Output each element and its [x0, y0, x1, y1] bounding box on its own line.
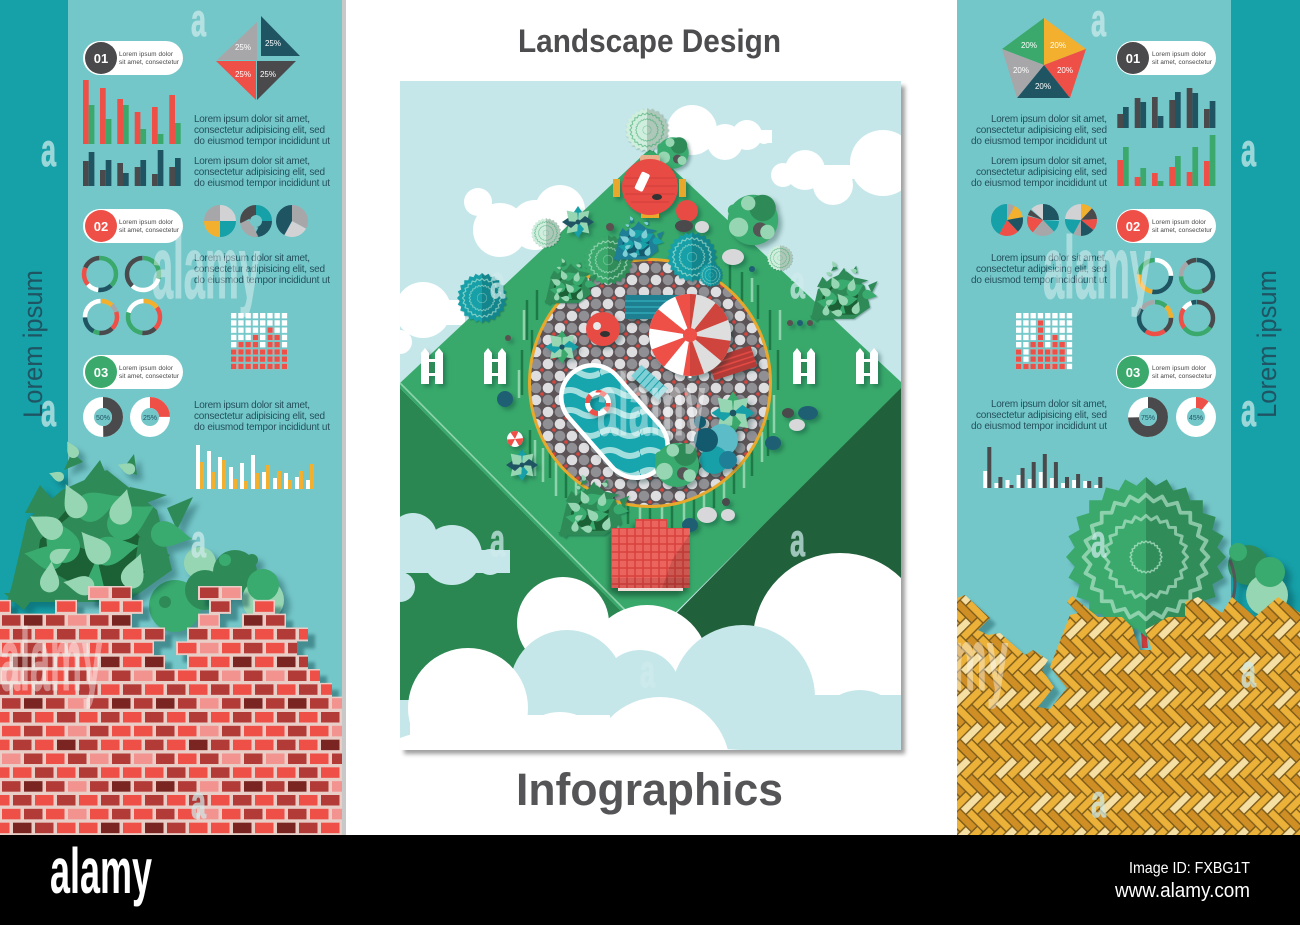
diamond chart: 25% — [260, 70, 276, 79]
left panel — [0, 0, 349, 843]
white and orange bar chart — [196, 445, 314, 489]
central poster illustration — [400, 81, 901, 750]
flower left — [506, 449, 538, 481]
pill 01 — [83, 41, 183, 75]
pill 02: 02 — [94, 219, 108, 234]
ring charts — [1139, 260, 1213, 334]
vertical heading: Lorem ipsum — [18, 270, 48, 418]
tree: teal small — [699, 263, 723, 287]
paragraph 2: Lorem ipsum dolor sit amet, — [194, 156, 310, 167]
poster shadow — [404, 86, 905, 754]
paragraph 1: do eiusmod tempor incididunt ut — [194, 136, 330, 147]
swimming pool rim — [593, 397, 636, 446]
swimming pool water — [593, 397, 636, 446]
paragraph 3: Lorem ipsum dolor sit amet, — [991, 253, 1107, 264]
pentagon chart: 20% — [1057, 66, 1073, 75]
watermark letters: a — [790, 256, 805, 308]
small bush behind tree — [1225, 543, 1288, 616]
white and grey bar chart — [983, 447, 1102, 488]
front white clouds — [400, 648, 740, 837]
donut 25 percent — [130, 397, 170, 437]
fence section 4 — [856, 348, 878, 384]
watermark letters: a — [790, 514, 805, 566]
small red table — [586, 312, 620, 346]
brick wall — [0, 586, 342, 835]
pill 02: sit amet, consectetur — [119, 227, 179, 234]
watermark letters: a — [640, 645, 655, 697]
donut 25 percent: 25% — [143, 415, 157, 422]
bush: round lower — [655, 443, 699, 487]
tree: teal left — [457, 273, 507, 323]
infographics heading: Infographics — [516, 764, 783, 815]
bottom black band — [0, 835, 1300, 925]
watermark letters: a — [191, 776, 206, 828]
donut 50 percent — [83, 397, 123, 437]
teal sun lounger — [625, 295, 690, 319]
sky — [400, 81, 901, 613]
paragraph 1 — [971, 114, 1107, 147]
pixel grid chart — [1016, 313, 1073, 371]
paragraph 4: Lorem ipsum dolor sit amet, — [991, 399, 1107, 410]
donut 75 percent: 75% — [1141, 415, 1155, 422]
lower right hill — [677, 388, 901, 638]
pentagon chart — [1002, 18, 1086, 98]
diamond chart: 25% — [235, 43, 251, 52]
bush: teal leaves — [613, 215, 664, 262]
paragraph 2 — [194, 156, 330, 189]
watermark alamy marks: alamy — [900, 610, 1008, 709]
garden stones — [497, 223, 818, 532]
bush: far right leaves — [810, 260, 878, 322]
tree: teal large — [667, 232, 717, 282]
paragraph 2: do eiusmod tempor incididunt ut — [971, 178, 1107, 189]
pill 01: sit amet, consectetur — [119, 59, 179, 66]
vertical heading: Lorem ipsum — [1252, 270, 1282, 418]
fence section 1 — [421, 348, 443, 384]
pill 02: sit amet, consectetur — [1152, 227, 1212, 234]
bush: top round — [657, 137, 689, 169]
paragraph 1: Lorem ipsum dolor sit amet, — [991, 114, 1107, 125]
exploded pie charts — [999, 212, 1089, 228]
middle pale clouds — [400, 625, 905, 780]
paragraph 3 — [194, 253, 330, 286]
paragraph 3: consectetur adipisicing elit, sed — [976, 264, 1107, 275]
pill 03: sit amet, consectetur — [119, 373, 179, 380]
watermark alamy marks: alamy — [0, 610, 102, 709]
tree: pale top — [625, 108, 669, 152]
upper clouds — [388, 105, 916, 354]
paragraph 4 — [194, 400, 330, 433]
paving stones — [531, 261, 769, 505]
grey and teal bar chart — [1117, 88, 1215, 128]
paragraph 4: consectetur adipisicing elit, sed — [976, 410, 1107, 421]
right panel dark teal strip — [1231, 0, 1300, 835]
grey and teal bar chart — [83, 150, 181, 186]
paragraph 2 — [971, 156, 1107, 189]
paragraph 3: do eiusmod tempor incididunt ut — [971, 275, 1107, 286]
pill 01: 01 — [1126, 51, 1140, 66]
right panel — [957, 0, 1300, 841]
house roof — [611, 519, 690, 591]
watermark letters: a — [1241, 645, 1256, 697]
grass strokes — [519, 265, 780, 535]
life buoy — [588, 392, 608, 414]
red lounger — [708, 345, 757, 380]
tree: green centre — [583, 235, 633, 285]
pill 01 — [1116, 41, 1216, 75]
flower top left — [562, 206, 594, 238]
paragraph 2: consectetur adipisicing elit, sed — [976, 167, 1107, 178]
watermark letters: a — [41, 124, 56, 176]
pill 01: Lorem ipsum dolor — [1152, 51, 1206, 58]
watermark letters: a — [41, 384, 56, 436]
pill 03 — [83, 355, 183, 389]
pentagon chart: 20% — [1035, 82, 1051, 91]
pale cloud on left hill — [400, 513, 510, 602]
red fruit and stones — [675, 200, 709, 233]
pill 02 — [1116, 209, 1216, 243]
paragraph 1: consectetur adipisicing elit, sed — [194, 125, 325, 136]
pill 01: Lorem ipsum dolor — [119, 51, 173, 58]
pill 03: 03 — [1126, 365, 1140, 380]
paragraph 3: consectetur adipisicing elit, sed — [194, 264, 325, 275]
watermark letters: a — [490, 256, 505, 308]
title: Landscape Design — [518, 23, 781, 59]
pill 02: 02 — [1126, 219, 1140, 234]
paragraph 1 — [194, 114, 330, 147]
large tree crown — [1066, 477, 1226, 637]
herringbone wall shadow — [963, 601, 1300, 841]
pill 02 — [83, 209, 183, 243]
donut 75 percent — [1128, 397, 1168, 437]
flower lower right — [711, 391, 755, 435]
alamy logo: alamy — [50, 835, 152, 907]
donut 50 percent: 50% — [96, 415, 110, 422]
paragraph 3: Lorem ipsum dolor sit amet, — [194, 253, 310, 264]
paragraph 4: consectetur adipisicing elit, sed — [194, 411, 325, 422]
herringbone wall — [957, 595, 1300, 835]
flower on terrace — [545, 330, 579, 364]
red and green bar chart — [1117, 135, 1215, 186]
paragraph 4: do eiusmod tempor incididunt ut — [194, 422, 330, 433]
bush: leaves on terrace top — [544, 257, 597, 305]
lower left hill — [400, 388, 621, 700]
paragraph 1: do eiusmod tempor incididunt ut — [971, 136, 1107, 147]
watermark letters: a — [490, 514, 505, 566]
pill 03: Lorem ipsum dolor — [1152, 365, 1206, 372]
paragraph 1: consectetur adipisicing elit, sed — [976, 125, 1107, 136]
tree: small pale left — [531, 218, 561, 248]
brick wall shadow — [11, 591, 340, 697]
diamond chart — [216, 16, 300, 100]
rear white clouds — [517, 553, 927, 750]
paragraph 2: do eiusmod tempor incididunt ut — [194, 178, 330, 189]
right panel light teal body — [957, 0, 1231, 835]
pixel grid chart — [231, 313, 289, 371]
paragraph 2: consectetur adipisicing elit, sed — [194, 167, 325, 178]
pool float mat — [631, 365, 668, 400]
pill 03: Lorem ipsum dolor — [119, 365, 173, 372]
left panel light teal body — [68, 0, 342, 697]
pill 03: 03 — [94, 365, 108, 380]
watermark letters: a — [191, 515, 206, 567]
left panel dark teal strip — [0, 0, 68, 614]
paragraph 1: Lorem ipsum dolor sit amet, — [194, 114, 310, 125]
donut 45 percent: 45% — [1189, 415, 1203, 422]
watermark alamy marks: alamy — [152, 218, 260, 317]
paragraph 4: Lorem ipsum dolor sit amet, — [194, 400, 310, 411]
pentagon chart: 20% — [1021, 41, 1037, 50]
pentagon chart: 20% — [1050, 41, 1066, 50]
pill 01: sit amet, consectetur — [1152, 59, 1212, 66]
leafy bush — [4, 439, 194, 610]
bush: round upper right — [728, 195, 778, 245]
green diamond lawn — [400, 148, 901, 615]
donut 45 percent — [1176, 397, 1216, 437]
image id: Image ID: FXBG1T — [1129, 860, 1250, 877]
text: alamy — [1043, 218, 1151, 317]
lawn edge highlight — [400, 383, 625, 610]
red and green bar chart — [83, 80, 181, 144]
round bushes behind wall — [149, 547, 284, 632]
parasol — [649, 294, 731, 378]
round red table — [613, 155, 686, 218]
large tree trunk — [1141, 630, 1148, 648]
striped ball — [507, 431, 523, 447]
watermark letters: a — [1091, 775, 1106, 827]
pill 02: Lorem ipsum dolor — [119, 219, 173, 226]
diamond chart: 25% — [265, 39, 281, 48]
bush: lower leaves — [558, 473, 630, 538]
pill 01: 01 — [94, 51, 108, 66]
tree: pale right — [767, 245, 793, 271]
watermark alamy marks: alamy — [597, 355, 705, 454]
left panel edge shadow — [342, 0, 346, 835]
pill 02: Lorem ipsum dolor — [1152, 219, 1206, 226]
pill 03 — [1116, 355, 1216, 389]
paragraph 3: do eiusmod tempor incididunt ut — [194, 275, 330, 286]
paragraph 4: do eiusmod tempor incididunt ut — [971, 421, 1107, 432]
watermark letters: a — [1241, 384, 1256, 436]
pill 03: sit amet, consectetur — [1152, 373, 1212, 380]
fence section 2 — [484, 348, 506, 384]
watermark alamy marks — [0, 218, 1151, 709]
website: www.alamy.com — [1114, 880, 1250, 902]
paragraph 3 — [971, 253, 1107, 286]
fence section 3 — [793, 348, 815, 384]
bush: teal lower right — [694, 416, 738, 474]
paragraph 4 — [971, 399, 1107, 432]
pie charts row — [212, 210, 300, 232]
watermark letters: a — [1241, 124, 1256, 176]
pentagon chart: 20% — [1013, 66, 1029, 75]
diamond chart: 25% — [235, 70, 251, 79]
paragraph 2: Lorem ipsum dolor sit amet, — [991, 156, 1107, 167]
watermark letters: a — [1091, 515, 1106, 567]
paved oval terrace — [528, 258, 772, 508]
ring charts — [84, 258, 160, 333]
